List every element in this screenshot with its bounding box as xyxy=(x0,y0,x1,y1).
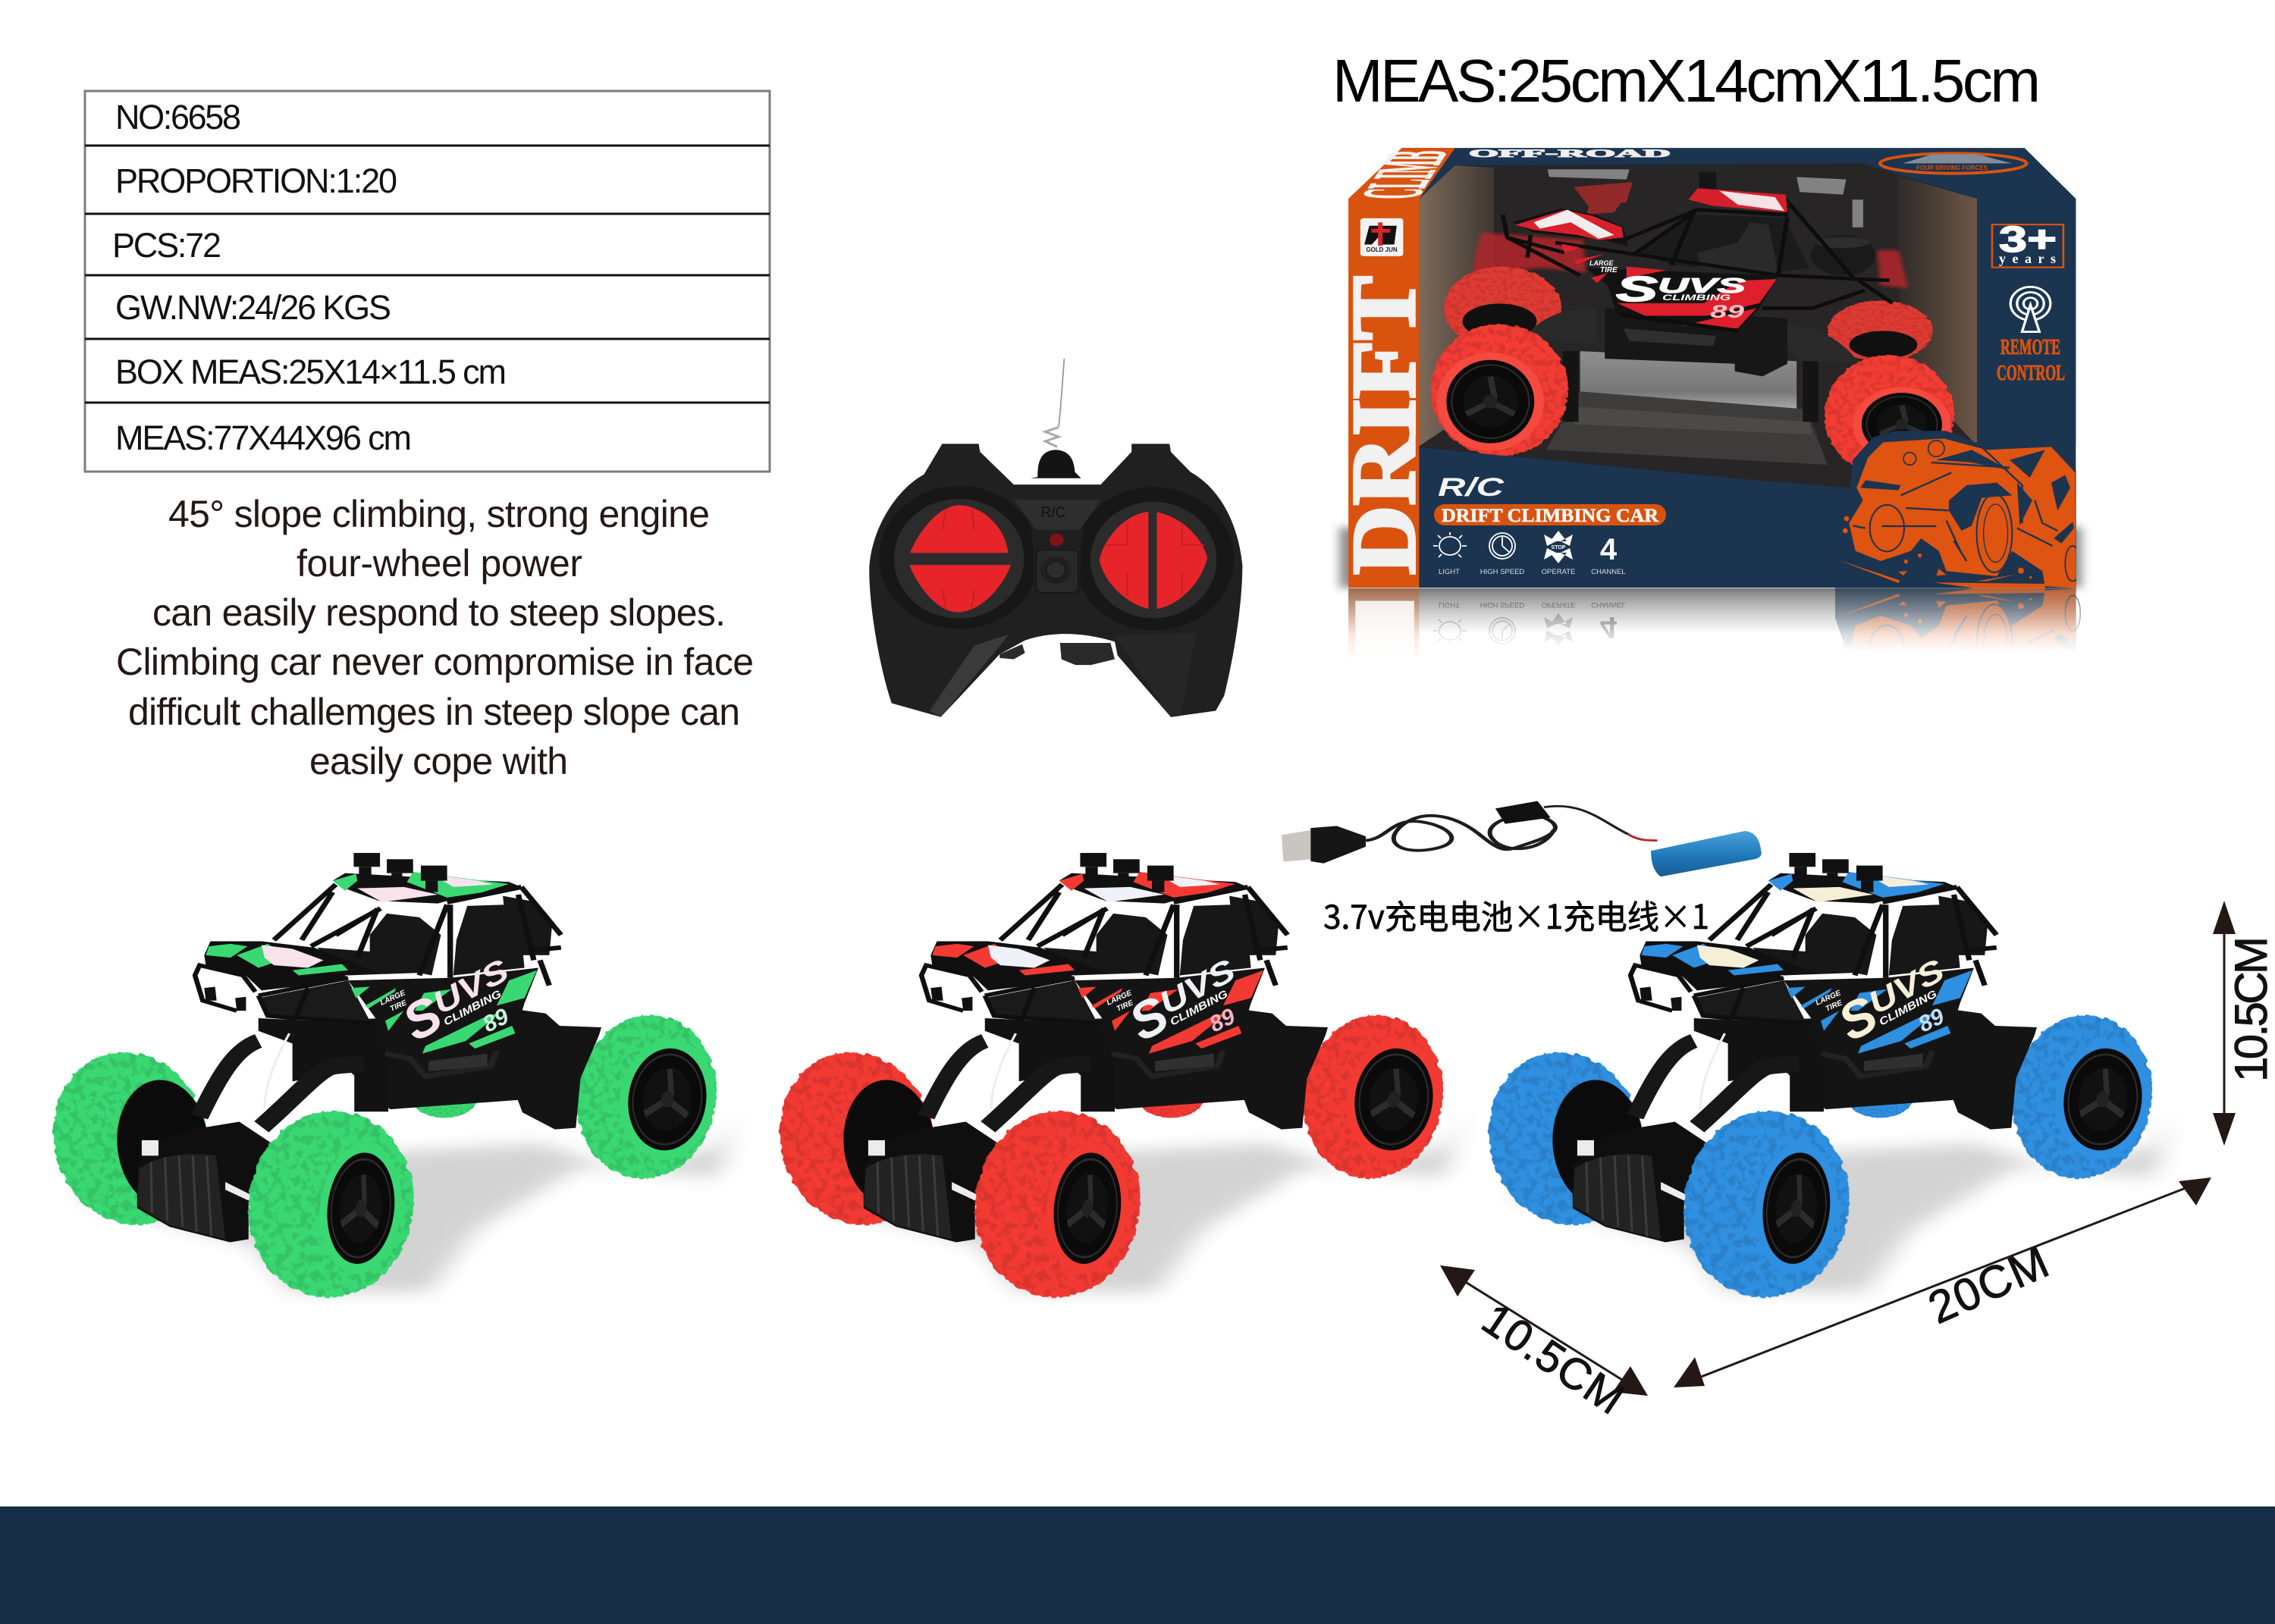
blue car xyxy=(1480,853,2176,1300)
description text block: 45° slope climbing, strong engine xyxy=(168,493,710,535)
bottom band xyxy=(0,1506,2275,1624)
description text block: can easily respond to steep slopes. xyxy=(152,591,726,634)
USB charging cable and battery xyxy=(1282,801,1762,876)
tower icon xyxy=(2010,287,2051,332)
box lower panel xyxy=(1419,447,1850,588)
width dimension arrow: 10.5CM xyxy=(1473,1294,1633,1424)
box side lettering: CLIMB: CLIMB xyxy=(1344,151,1466,199)
red car: CLIMBING xyxy=(1168,987,1230,1028)
car graphics on box: LARGE xyxy=(1589,259,1614,267)
box feature labels: STOP xyxy=(1552,545,1566,550)
description text block xyxy=(116,493,754,782)
car graphics on box xyxy=(1589,259,1746,322)
description text block: easily cope with xyxy=(309,740,568,782)
green car: 89 xyxy=(479,1004,513,1037)
table row: carton measure: MEAS:77X44X96 cm xyxy=(115,419,412,457)
box pill: drift climbing car: DRIFT CLIMBING CAR xyxy=(1442,506,1659,526)
car graphics on box: TIRE xyxy=(1600,266,1618,274)
spec table xyxy=(85,91,770,472)
table row: box measure: BOX MEAS:25X14×11.5 cm xyxy=(115,353,507,391)
box lettering: age: 3+ xyxy=(1999,220,2057,260)
box art: orange truck xyxy=(1835,431,2080,588)
width dimension arrow xyxy=(1440,1265,1648,1424)
green car: S xyxy=(394,985,451,1052)
remote control xyxy=(869,359,1242,717)
blue car: TIRE xyxy=(1825,999,1844,1014)
box top lettering: OFF-ROAD: OFF-ROAD xyxy=(1469,148,1671,160)
box logo xyxy=(1360,218,1403,256)
description text block: four-wheel power xyxy=(297,542,582,585)
box reflection xyxy=(1433,588,2081,649)
box lettering: badge: FOUR DRIVING FORCES xyxy=(1916,165,1988,171)
table row: pieces: PCS:72 xyxy=(112,226,221,265)
box reflection: OPERATE xyxy=(1542,600,1575,609)
product box xyxy=(1332,148,2088,654)
green car: UVS xyxy=(427,952,514,1021)
blue car: UVS xyxy=(1862,952,1950,1021)
box reflection: LIGHT xyxy=(1439,600,1460,609)
green car: CLIMBING xyxy=(441,987,504,1028)
table row: weight: GW.NW:24/26 KGS xyxy=(115,288,391,327)
box reflection: 4 xyxy=(1600,610,1618,644)
box feature labels: HIGH SPEED xyxy=(1480,568,1524,576)
height dimension arrow xyxy=(2213,901,2275,1146)
box lettering: years: years xyxy=(1999,251,2056,266)
box feature labels: CHANNEL xyxy=(1591,568,1626,576)
blue car: CLIMBING xyxy=(1877,987,1939,1028)
green car: LARGE xyxy=(379,989,406,1008)
car graphics on box: S xyxy=(1616,269,1658,309)
car graphics on box: UVS xyxy=(1658,274,1746,297)
car graphics on box: CLIMBING xyxy=(1662,293,1731,303)
box lettering: R/C: R/C xyxy=(1438,473,1505,502)
red car: UVS xyxy=(1153,952,1241,1021)
red car: 89 xyxy=(1206,1004,1239,1037)
blue car: LARGE xyxy=(1815,989,1842,1008)
battery caption: 3.7v充电电池×1充电线×1 xyxy=(1323,890,1709,939)
green car xyxy=(45,853,741,1300)
red car: TIRE xyxy=(1116,999,1134,1014)
green car: TIRE xyxy=(389,999,408,1014)
description text block: Climbing car never compromise in face xyxy=(116,641,754,683)
box lettering: logo: GOLD JUN xyxy=(1366,246,1398,253)
remote label R/C: R/C xyxy=(1041,505,1065,521)
box feature labels: LIGHT xyxy=(1439,568,1460,576)
box badge 3+ xyxy=(1992,224,2063,268)
box feature icons xyxy=(1433,531,1573,563)
box side lettering: DRIFT: DRIFT xyxy=(1333,276,1434,575)
box interior and toy car xyxy=(1431,169,1954,476)
table row: proportion: PROPORTION:1:20 xyxy=(115,161,397,200)
length dimension arrow xyxy=(1674,1177,2211,1387)
box lettering: control: CONTROL xyxy=(1997,362,2065,385)
box reflection: HIGH SPEED xyxy=(1480,600,1524,609)
box feature labels xyxy=(1439,545,1626,576)
blue car: 89 xyxy=(1915,1004,1948,1037)
blue car: S xyxy=(1829,985,1887,1052)
table row: number: NO:6658 xyxy=(115,98,241,136)
box lettering: remote: REMOTE xyxy=(2000,336,2060,359)
length dimension arrow: 20CM xyxy=(1921,1237,2056,1334)
red car: S xyxy=(1120,985,1178,1052)
box feature: channel number: 4 xyxy=(1600,533,1618,566)
red car xyxy=(771,853,1467,1300)
car graphics on box: 89 xyxy=(1710,302,1745,322)
description text block: difficult challemges in steep slope can xyxy=(128,691,740,733)
height dimension arrow: 10.5CM xyxy=(2226,936,2275,1082)
title: box measurement: MEAS:25cmX14cmX11.5cm xyxy=(1332,47,2041,114)
box feature labels: OPERATE xyxy=(1542,568,1575,576)
red car: LARGE xyxy=(1106,989,1133,1008)
box reflection: CHANNEL xyxy=(1591,600,1626,609)
